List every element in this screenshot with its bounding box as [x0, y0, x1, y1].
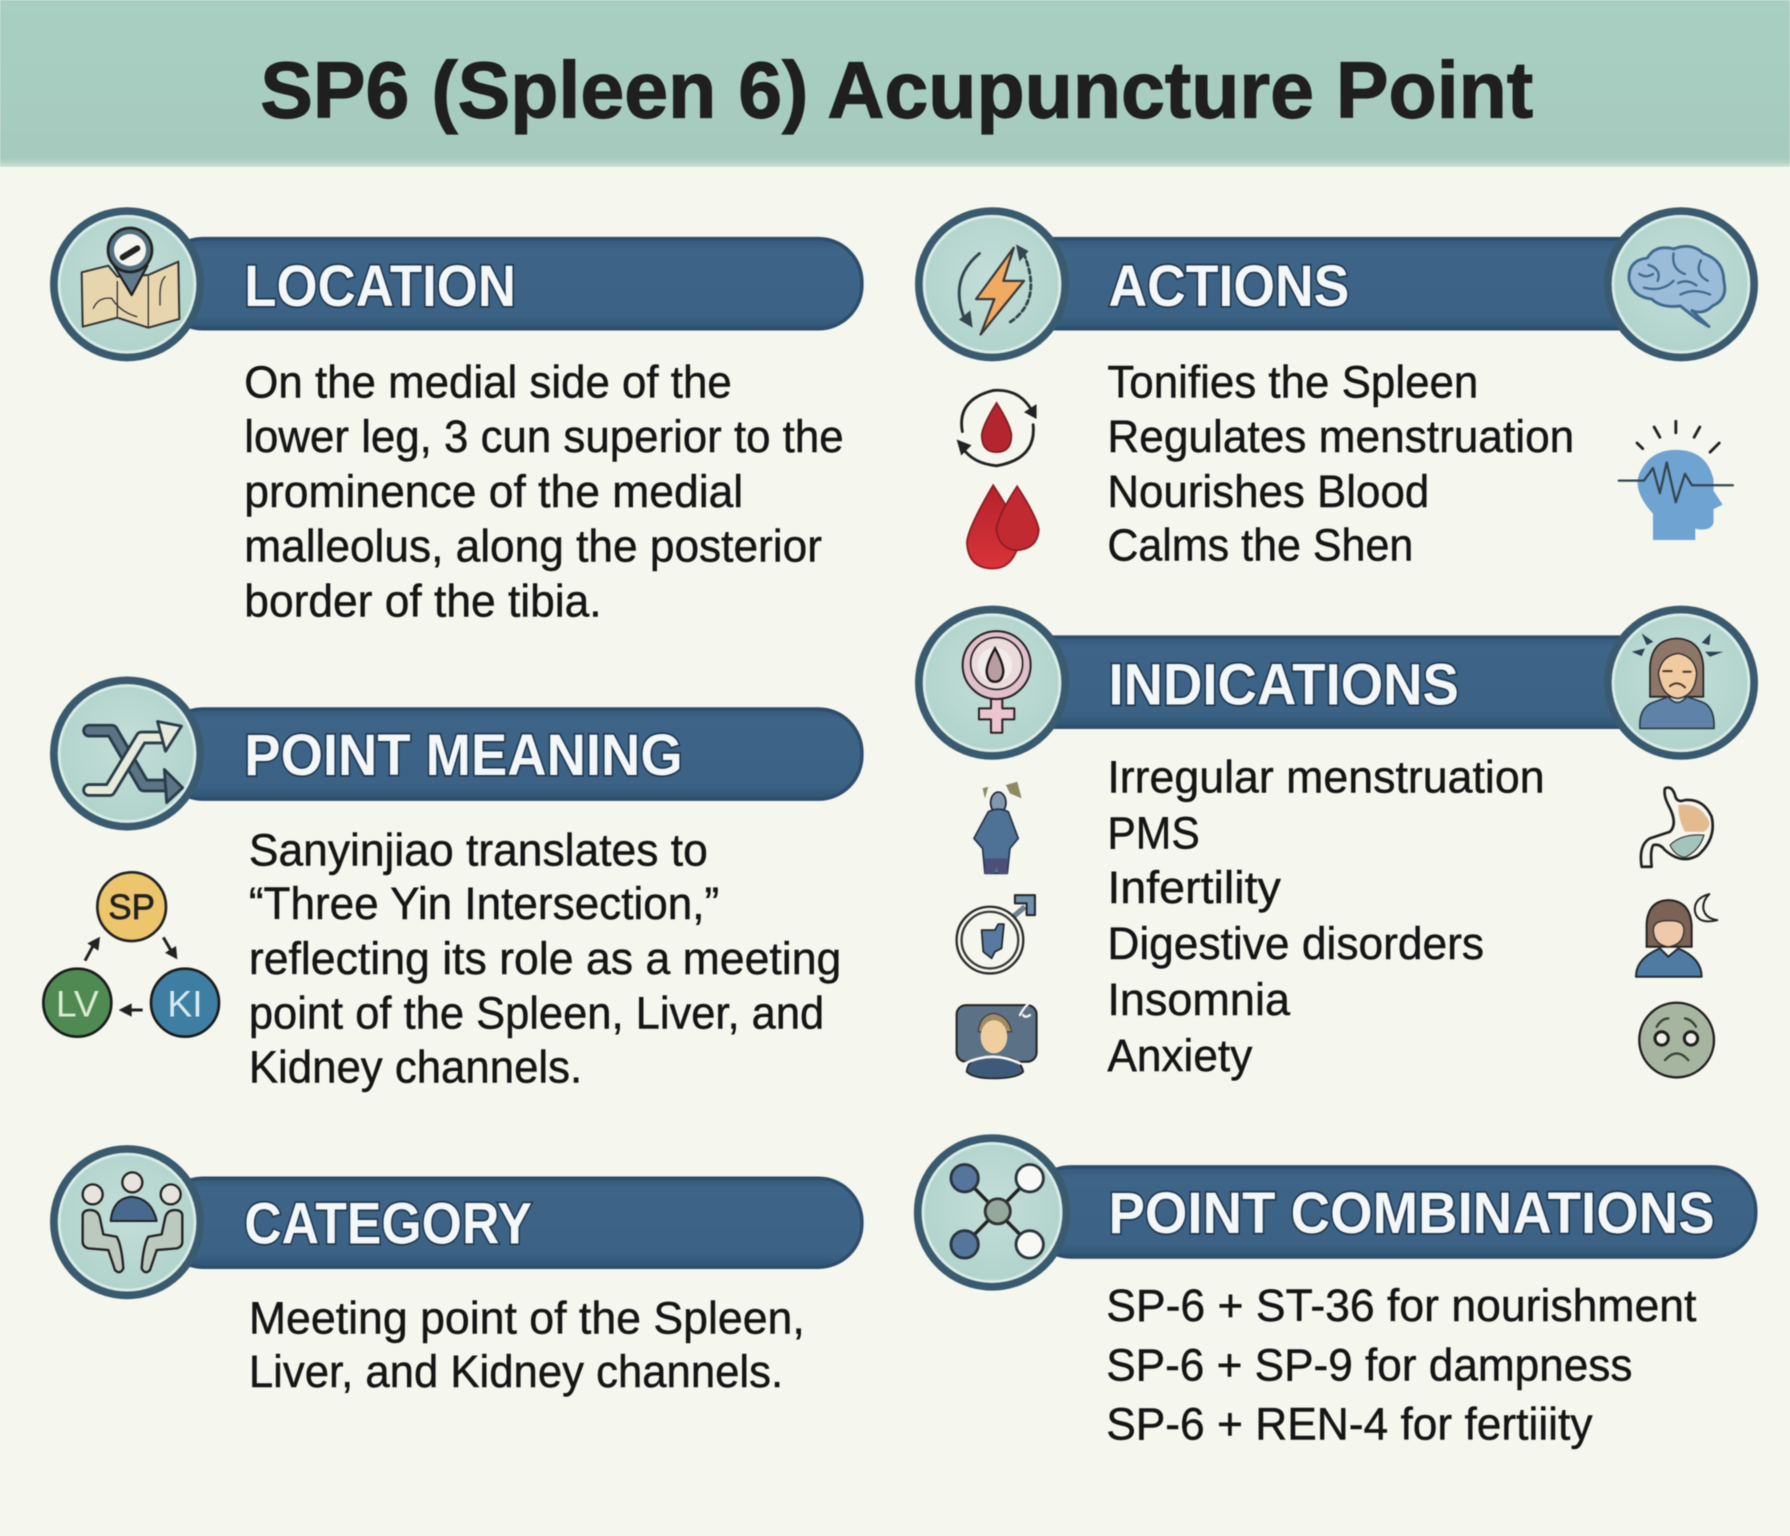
header banner [0, 0, 1790, 167]
location description: On the medial side of the [244, 356, 732, 407]
point combinations header bar [1027, 1167, 1756, 1257]
indications left icon disc [919, 610, 1065, 756]
indications list: Digestive disorders [1107, 918, 1484, 969]
icon: head with brain wave [1619, 421, 1733, 540]
LV node: LV [56, 983, 99, 1025]
icon: woman with headache [1632, 633, 1723, 728]
indications list: Infertility [1107, 862, 1281, 913]
SP node: SP [108, 888, 155, 927]
icon: female symbol with drop [963, 631, 1031, 733]
panel: actions [919, 211, 1754, 571]
location description: border of the tibia. [244, 575, 602, 627]
actions left icon disc [919, 211, 1065, 357]
icon: network of points [951, 1165, 1043, 1258]
point meaning icon disc [54, 680, 200, 827]
point meaning description: “Three Yin Intersection,” [249, 878, 719, 929]
point combinations heading: POINT COMBINATIONS [1108, 1181, 1715, 1246]
point combinations list: SP-6 + ST-36 for nourishment [1106, 1280, 1697, 1331]
icon: sleepless woman with moon [1636, 894, 1717, 977]
icon: anxious face [1639, 1003, 1714, 1077]
panel: point meaning [43, 680, 862, 1092]
indications right icon disc [1608, 610, 1754, 756]
actions list: Calms the Shen [1107, 520, 1413, 571]
point meaning description: Kidney channels. [249, 1041, 582, 1092]
indications list [1107, 751, 1545, 1081]
location description: malleolus, along the posterior [244, 521, 822, 572]
location header bar [160, 239, 862, 329]
SP node [97, 872, 166, 941]
category description: Meeting point of the Spleen, [249, 1292, 805, 1343]
actions list [1107, 356, 1574, 571]
indications list: Insomnia [1107, 974, 1291, 1025]
point combinations list: SP-6 + SP-9 for dampness [1106, 1339, 1632, 1390]
category description: Liver, and Kidney channels. [249, 1346, 783, 1397]
icon: blood drop with cycle [957, 390, 1037, 466]
point combinations list: SP-6 + REN-4 for fertiiity [1106, 1399, 1593, 1450]
panel: location [54, 211, 862, 627]
category heading: CATEGORY [244, 1191, 532, 1256]
KI node [151, 969, 219, 1037]
icon: blood drops [967, 485, 1039, 569]
actions header bar [1027, 239, 1667, 329]
actions right icon disc [1608, 211, 1754, 357]
panel: point combinations [918, 1138, 1756, 1450]
indications header bar [1027, 637, 1667, 727]
icon: lightning with cycle arrows [959, 244, 1031, 335]
icon: person on pillow [957, 1002, 1037, 1078]
indications list: Anxiety [1107, 1030, 1252, 1081]
panel: indications [919, 610, 1754, 1081]
location description: prominence of the medial [244, 466, 743, 517]
point meaning description: Sanyinjiao translates to [249, 824, 708, 875]
icon: seated people meeting [83, 1172, 182, 1272]
point meaning description [249, 824, 841, 1092]
category icon disc [54, 1149, 200, 1295]
LV node [43, 969, 111, 1037]
category header bar [160, 1178, 862, 1267]
point meaning heading: POINT MEANING [244, 723, 683, 788]
location description: lower leg, 3 cun superior to the [244, 411, 844, 462]
point meaning description: point of the Spleen, Liver, and [249, 988, 824, 1039]
indications list: Irregular menstruation [1107, 751, 1545, 802]
icon: stressed figure [974, 782, 1022, 874]
indications list: PMS [1107, 807, 1200, 858]
panel: category [54, 1149, 862, 1397]
actions list: Tonifies the Spleen [1107, 356, 1478, 407]
icon: crossing arrows [89, 722, 183, 803]
icons: right indication symbols [1636, 788, 1717, 1077]
icon: map with pin [82, 228, 179, 328]
location icon disc [54, 211, 200, 357]
location description [244, 356, 844, 627]
actions list: Nourishes Blood [1107, 466, 1429, 517]
arrows between channels [85, 937, 177, 1017]
actions list: Regulates menstruation [1107, 411, 1574, 462]
icon: male symbol with stomach [957, 895, 1035, 973]
point meaning description: reflecting its role as a meeting [249, 933, 841, 984]
icons: left indication symbols [957, 782, 1037, 1078]
diagram: SP LV KI meeting triad [43, 872, 219, 1037]
actions heading: ACTIONS [1108, 254, 1349, 319]
category description [249, 1292, 805, 1397]
icon: brain [1629, 246, 1725, 327]
point meaning header bar [160, 709, 862, 799]
indications heading: INDICATIONS [1108, 652, 1459, 717]
icon: stomach [1641, 788, 1713, 867]
point combinations list [1106, 1280, 1697, 1450]
title: SP6 (Spleen 6) Acupuncture Point [260, 46, 1533, 135]
combinations icon disc [918, 1138, 1066, 1287]
location heading: LOCATION [244, 254, 516, 319]
KI node: KI [167, 983, 203, 1025]
